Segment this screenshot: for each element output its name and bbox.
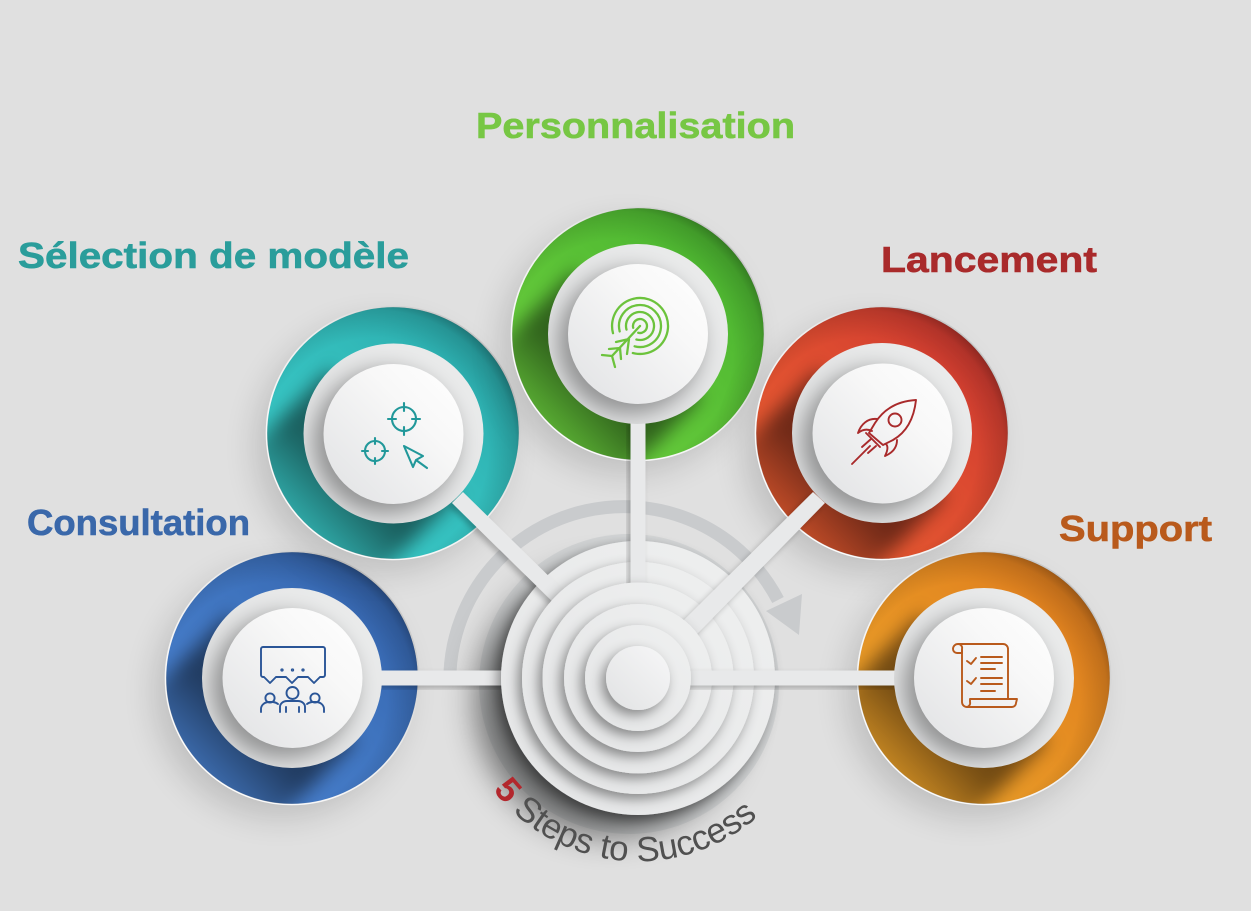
step disc: Lancement colour ring (735, 306, 1010, 582)
hub long shadow (476, 568, 744, 836)
icon: target with arrow (602, 298, 668, 367)
step disc: Support colour ring (837, 551, 1112, 827)
heading: Personnalisation: Personnalisation (476, 105, 795, 146)
hub level 4 (564, 604, 712, 752)
icon: checklist scroll (953, 644, 1017, 707)
icon: targets and cursor (362, 403, 427, 468)
button: Sélection de modèle (304, 344, 484, 524)
icon: audience with speech bubble (261, 647, 325, 712)
button: Consultation (202, 588, 382, 768)
step disc: Consultation colour ring (145, 551, 419, 827)
connector to Consultation (375, 670, 505, 686)
button: Personnalisation (548, 244, 728, 424)
connector to Personnalisation (630, 420, 646, 586)
button: Lancement (792, 343, 972, 523)
curved caption: 5 Steps to Success: 5 Steps to Success (496, 776, 756, 862)
connector to Sélection de modèle (452, 492, 565, 603)
heading: Sélection de modèle: Sélection de modèle (18, 235, 409, 276)
hub level 1 (501, 541, 775, 815)
heading: Support: Support (1059, 508, 1212, 549)
step disc: Sélection de modèle colour ring (246, 306, 520, 582)
circular arrow (450, 507, 802, 672)
central hub stacked discs with connectors (375, 420, 901, 836)
icon: rocket (852, 400, 916, 464)
step disc: Personnalisation colour ring (491, 207, 766, 483)
button: Support (894, 588, 1074, 768)
hub backdrop shadow band (479, 534, 779, 834)
heading: Consultation: Consultation (27, 502, 250, 543)
heading: Lancement: Lancement (881, 239, 1097, 280)
hub centre button (606, 646, 670, 710)
hub level 2 (522, 562, 754, 794)
hub level 5 (585, 625, 691, 731)
hub level 3 (542, 582, 734, 774)
connector to Lancement (681, 492, 825, 636)
connector to Support (686, 670, 901, 686)
